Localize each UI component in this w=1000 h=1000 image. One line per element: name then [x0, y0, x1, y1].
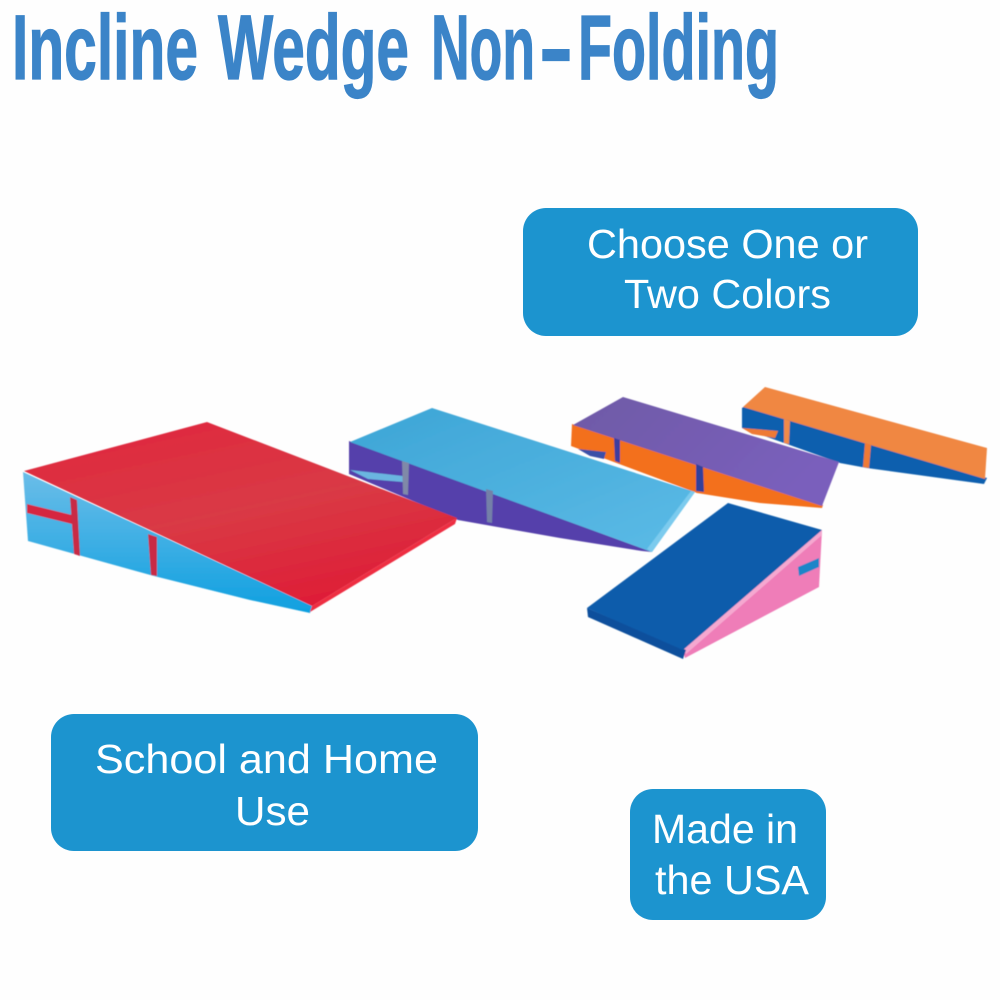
callout: school and home use: School and Home [95, 736, 438, 782]
callout: school and home use [51, 714, 478, 851]
wedge: blue and pink [587, 503, 822, 659]
callout: choose colors [523, 208, 918, 336]
wedge: orange and blue [742, 387, 987, 484]
title: Non [431, 0, 535, 99]
wedge: cyan and purple [349, 408, 695, 552]
callout: choose colors: Choose One or [587, 221, 868, 267]
callout: made in the USA [630, 789, 826, 920]
wedge: purple and orange [571, 397, 839, 508]
callout: choose colors: Two Colors [624, 271, 831, 317]
wedge: red and light blue [23, 422, 457, 613]
title: - [539, 0, 573, 99]
callout: made in the USA: the USA [655, 857, 810, 903]
title: Incline [12, 0, 198, 99]
product illustration: five incline wedge mats [23, 387, 987, 659]
title: Folding [578, 0, 779, 99]
callout: school and home use: Use [235, 788, 310, 834]
callout: made in the USA: Made in [652, 806, 798, 852]
title: Wedge [218, 0, 409, 99]
